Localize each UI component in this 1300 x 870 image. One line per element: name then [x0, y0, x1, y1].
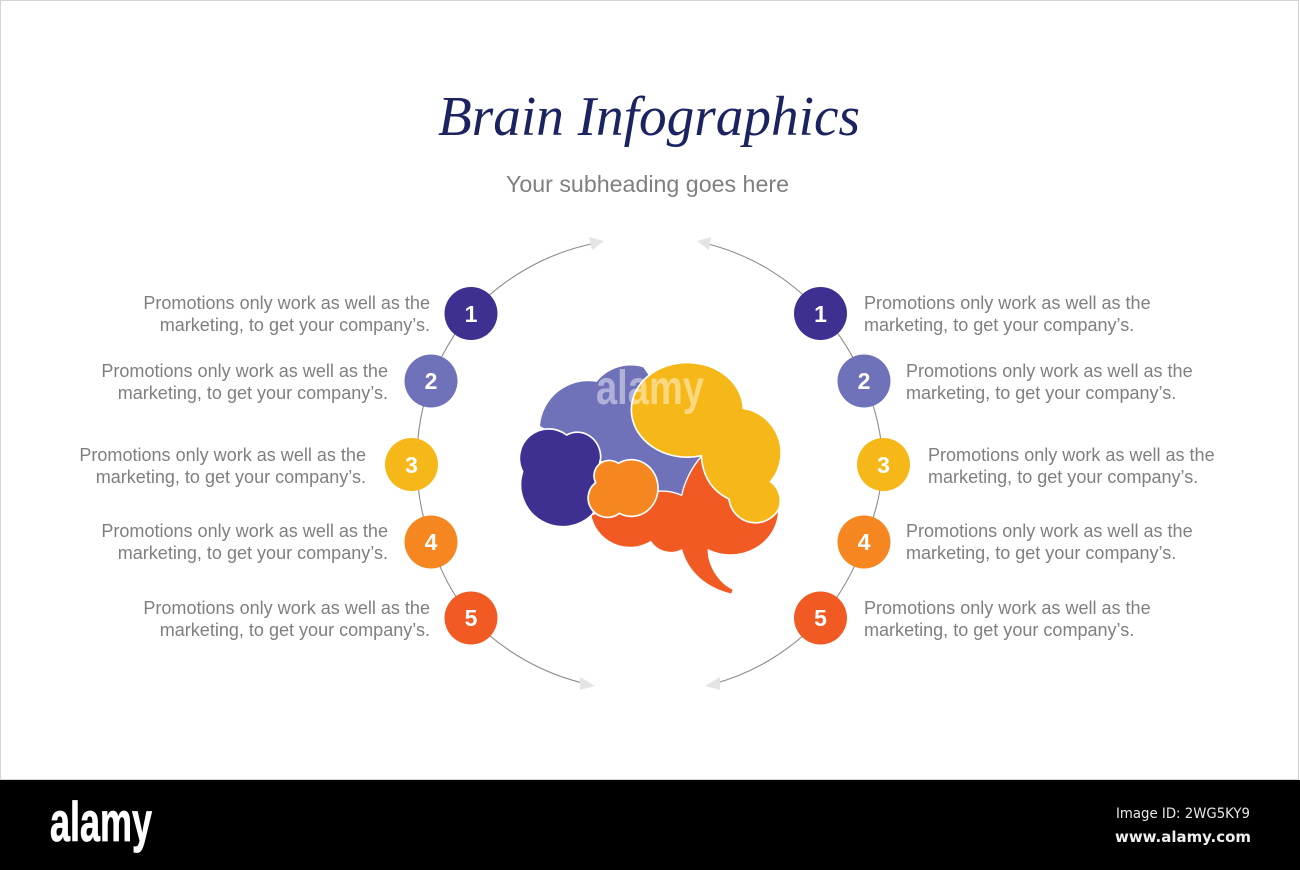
- right item 5: 5: [814, 605, 827, 631]
- right item 3: marketing, to get your company’s.: [928, 467, 1198, 487]
- subheading: Your subheading goes here: [506, 171, 789, 197]
- image id: Image ID: 2WG5KY9: [1116, 806, 1250, 822]
- left item 5: 5: [465, 605, 478, 631]
- right item 2: 2: [858, 368, 870, 394]
- left item 2: 2: [425, 368, 437, 394]
- left item 3: marketing, to get your company’s.: [96, 467, 366, 487]
- right item 2: marketing, to get your company’s.: [906, 383, 1176, 403]
- left item 5: marketing, to get your company’s.: [160, 620, 430, 640]
- right item 3: 3: [877, 452, 890, 478]
- right item 3: Promotions only work as well as the: [928, 445, 1215, 465]
- left item 3: Promotions only work as well as the: [79, 445, 366, 465]
- left arc with arrows: [417, 237, 604, 690]
- right item 1: Promotions only work as well as the: [864, 293, 1151, 313]
- right item 1: marketing, to get your company’s.: [864, 315, 1134, 335]
- left item 4: [101, 516, 458, 568]
- brain lobe: yellow: [631, 362, 781, 523]
- footer logo: alamy: [50, 790, 152, 853]
- right item 1: [794, 287, 1151, 340]
- brain lobe: red orange: [591, 456, 779, 594]
- left item 4: Promotions only work as well as the: [101, 521, 388, 541]
- left item 3: [79, 438, 438, 491]
- right item 4: marketing, to get your company’s.: [906, 543, 1176, 563]
- right item 5: Promotions only work as well as the: [864, 598, 1151, 618]
- center watermark: alamy: [596, 362, 704, 415]
- right item 2: [838, 354, 1193, 408]
- left item 1: Promotions only work as well as the: [143, 293, 430, 313]
- right item 5: marketing, to get your company’s.: [864, 620, 1134, 640]
- right item 2: Promotions only work as well as the: [906, 361, 1193, 381]
- left item 3: 3: [405, 452, 418, 478]
- left item 1: 1: [465, 301, 478, 327]
- brain lobe: small orange: [588, 460, 658, 517]
- title: Brain Infographics: [438, 86, 860, 148]
- left item 1: [143, 287, 498, 340]
- right item 4: [838, 516, 1193, 568]
- right item 4: 4: [858, 529, 871, 555]
- right arc with arrows: [697, 237, 883, 690]
- brain lobe: dark purple: [519, 429, 601, 527]
- right item 4: Promotions only work as well as the: [906, 521, 1193, 541]
- brain: [519, 362, 781, 594]
- left item 1: marketing, to get your company’s.: [160, 315, 430, 335]
- left item 2: marketing, to get your company’s.: [118, 383, 388, 403]
- left item 5: [143, 592, 498, 644]
- left item 4: marketing, to get your company’s.: [118, 543, 388, 563]
- right item 5: [794, 592, 1151, 644]
- left item 5: Promotions only work as well as the: [143, 598, 430, 618]
- left item 4: 4: [425, 529, 438, 555]
- website: www.alamy.com: [1115, 828, 1251, 846]
- right item 3: [857, 438, 1215, 491]
- brain lobe: light purple: [540, 365, 703, 495]
- left item 2: [101, 354, 458, 408]
- right item 1: 1: [814, 301, 827, 327]
- footer bar: [0, 780, 1300, 870]
- left item 2: Promotions only work as well as the: [101, 361, 388, 381]
